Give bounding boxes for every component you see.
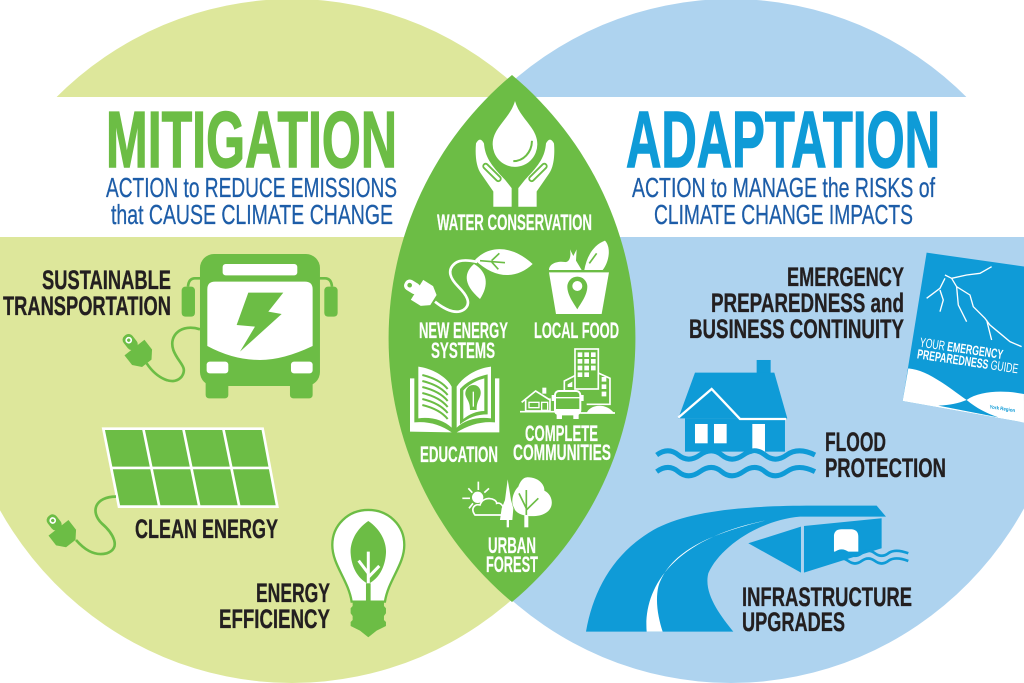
label: urban forest: FOREST	[486, 552, 538, 577]
label: new energy systems: SYSTEMS	[431, 338, 495, 363]
icon: complete community	[520, 349, 615, 419]
label: flood protection	[825, 427, 946, 483]
label: flood protection: FLOOD	[825, 427, 886, 457]
heading: mitigation: that CAUSE CLIMATE CHANGE	[111, 199, 393, 230]
icon: local food basket	[549, 241, 609, 314]
label: energy efficiency: ENERGY	[256, 578, 330, 608]
label: energy efficiency	[219, 578, 330, 634]
label: complete communities: COMMUNITIES	[513, 440, 611, 465]
label: emergency preparedness and business continuity: EMERGENCY	[787, 262, 904, 292]
heading: mitigation	[106, 95, 397, 230]
white heading band	[0, 97, 1024, 237]
label: clean energy: CLEAN ENERGY	[135, 514, 278, 544]
label: sustainable transportation: SUSTAINABLE	[42, 265, 171, 295]
label: sustainable transportation	[3, 265, 171, 321]
label: infrastructure upgrades	[742, 582, 912, 637]
label: emergency preparedness and business continuity	[689, 262, 904, 344]
label: education: EDUCATION	[420, 442, 498, 467]
background circle: mitigation	[0, 0, 628, 683]
label: urban forest	[486, 533, 538, 577]
icon: water drop in hands	[476, 101, 554, 207]
icon: emergency preparedness guide booklet	[903, 253, 1024, 423]
label: new energy systems: NEW ENERGY	[419, 318, 508, 343]
icon: plug with leaves	[399, 249, 533, 312]
panel: shared actions in overlap	[399, 101, 619, 577]
label: emergency preparedness and business continuity: BUSINESS CONTINUITY	[689, 314, 904, 344]
label: water conservation: WATER CONSERVATION	[437, 210, 592, 235]
panel: mitigation items	[3, 254, 404, 637]
heading: mitigation: ACTION to REDUCE EMISSIONS	[106, 172, 397, 203]
label: infrastructure upgrades: UPGRADES	[742, 607, 845, 637]
icon: flooded house	[657, 360, 815, 476]
icon: road and bridge	[586, 506, 908, 632]
overlap lens	[389, 75, 635, 602]
label: infrastructure upgrades: INFRASTRUCTURE	[742, 582, 912, 612]
label: flood protection: PROTECTION	[825, 453, 946, 483]
label: urban forest: URBAN	[488, 533, 536, 558]
icon: electric bus	[115, 254, 338, 398]
icon: emergency preparedness guide booklet: York Region	[989, 404, 1016, 414]
label: sustainable transportation: TRANSPORTATION	[3, 291, 171, 321]
label: complete communities	[513, 421, 611, 465]
heading: mitigation: MITIGATION	[106, 95, 397, 184]
heading: adaptation: CLIMATE CHANGE IMPACTS	[654, 199, 913, 230]
icon: open book	[410, 367, 499, 432]
icon: light bulb with leaf	[332, 510, 404, 637]
icon: solar panel	[39, 429, 277, 554]
label: local food: LOCAL FOOD	[534, 318, 619, 343]
label: new energy systems	[419, 318, 508, 363]
heading: adaptation	[626, 95, 940, 230]
label: energy efficiency: EFFICIENCY	[219, 604, 330, 634]
label: complete communities: COMPLETE	[525, 421, 598, 446]
icon: urban forest	[462, 477, 552, 527]
panel: adaptation items	[586, 253, 1024, 637]
background circle: adaptation	[395, 0, 1024, 683]
label: emergency preparedness and business continuity: PREPAREDNESS and	[711, 288, 904, 318]
